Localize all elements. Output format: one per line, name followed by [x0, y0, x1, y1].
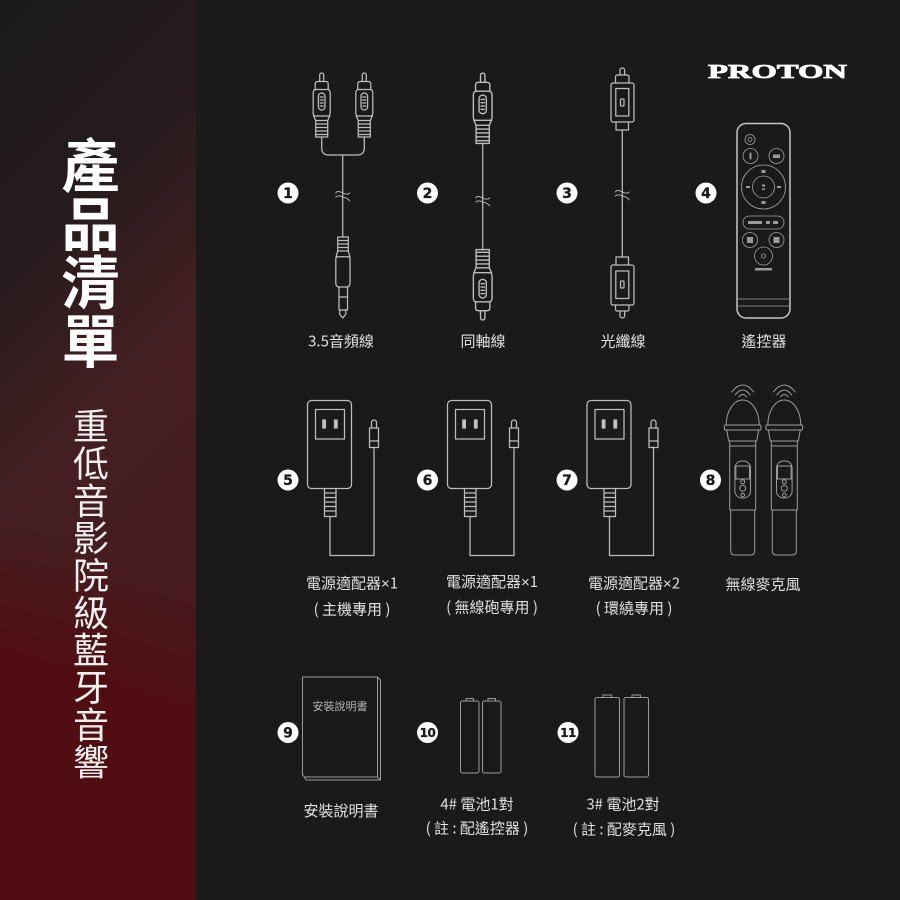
badge 4: 4: [701, 186, 711, 202]
icon: adapter: [448, 400, 518, 556]
label: 遙控器: [741, 330, 787, 352]
item 9: manual: [278, 677, 380, 821]
label: [573, 794, 675, 840]
heading: 產品清單: 品: [61, 178, 120, 262]
badge 3: [556, 182, 578, 204]
icon: two microphones: [724, 385, 803, 555]
subtitle: 重低音影院級藍牙音響: 低: [73, 436, 109, 488]
label: 3.5音頻線: [308, 330, 374, 352]
subtitle: 重低音影院級藍牙音響: 牙: [73, 660, 109, 712]
icon: adapter: [587, 400, 658, 556]
subtitle: 重低音影院級藍牙音響: 音: [73, 697, 109, 749]
subtitle: 重低音影院級藍牙音響: 影: [73, 510, 109, 562]
label: 電源適配器×1: [446, 571, 538, 592]
label: ( 主機專用 ): [314, 598, 390, 620]
badge 2: 2: [423, 186, 432, 202]
item 10: 4# batteries: [417, 698, 528, 838]
icon: 3.5mm to RCA cable: [313, 73, 373, 318]
item 8: wireless microphones: [700, 385, 803, 594]
label: [426, 794, 528, 838]
heading: 產品清單: 單: [61, 296, 120, 380]
subtitle: 重低音影院級藍牙音響: [73, 398, 109, 786]
panel: left title band: [0, 0, 196, 900]
label: 安裝說明書: [303, 800, 379, 821]
heading: 產品清單: [61, 120, 120, 380]
label: 無線麥克風: [725, 574, 801, 594]
logo: PROTON: PROTON: [708, 61, 847, 83]
label: ( 環繞專用 ): [596, 598, 672, 618]
badge 5: 5: [283, 473, 293, 489]
badge 6: [417, 470, 438, 490]
badge 1: 1: [283, 186, 293, 202]
label: [306, 572, 398, 620]
subtitle: 重低音影院級藍牙音響: 響: [73, 734, 109, 786]
label: 4# 電池1對: [440, 794, 514, 814]
icon: optical cable: [611, 68, 634, 318]
badge 7: 7: [562, 473, 572, 489]
badge 9: [278, 722, 298, 743]
item 5: power adapter for main unit: [278, 400, 398, 620]
label: [446, 571, 538, 618]
icon: two AA batteries: [595, 695, 648, 777]
item 7: power adapter for surround: [556, 400, 680, 618]
item 6: power adapter for wireless subwoofer: [417, 400, 538, 618]
icon: coaxial cable: [473, 73, 492, 320]
label: ( 註 : 配麥克風 ): [573, 818, 675, 840]
label: 電源適配器×2: [588, 572, 680, 594]
label: [588, 572, 680, 618]
badge 7: [556, 470, 578, 490]
label: 3# 電池2對: [586, 794, 660, 814]
label: 電源適配器×1: [306, 572, 398, 594]
subtitle: 重低音影院級藍牙音響: 院: [73, 548, 109, 600]
badge 5: [278, 470, 298, 490]
badge 2: [417, 182, 438, 204]
badge 6: 6: [423, 473, 432, 489]
label: ( 無線砲專用 ): [446, 596, 538, 618]
item 1: 3.5 audio cable: [278, 73, 374, 352]
item 11: 3# batteries: [558, 695, 675, 840]
subtitle: 重低音影院級藍牙音響: 級: [73, 585, 109, 637]
badge 8: 8: [706, 473, 715, 489]
icon: adapter: [308, 400, 378, 556]
badge 4: [696, 182, 716, 204]
subtitle: 重低音影院級藍牙音響: 音: [73, 473, 109, 525]
badge 8: [700, 470, 721, 490]
item 2: coaxial cable: [417, 73, 506, 352]
label: ( 註 : 配遙控器 ): [426, 818, 528, 838]
badge 11: 11: [560, 726, 576, 740]
label: 同軸線: [460, 330, 506, 352]
label: 光纖線: [600, 330, 646, 352]
icon: remote: [737, 124, 790, 318]
item 3: optical fibre cable: [556, 68, 646, 352]
subtitle: 重低音影院級藍牙音響: 藍: [73, 622, 109, 674]
icon: manual book: [302, 677, 380, 780]
badge 3: 3: [562, 186, 572, 202]
badge 11: [558, 722, 578, 743]
icon: manual book: 安裝說明書: [312, 698, 368, 714]
icon: two AAA batteries: [460, 698, 501, 773]
badge 9: 9: [283, 726, 293, 742]
badge 1: [278, 182, 298, 204]
heading: 產品清單: 清: [61, 237, 120, 321]
item 4: remote control: [696, 124, 790, 352]
subtitle: 重低音影院級藍牙音響: 重: [73, 398, 109, 450]
badge 10: 10: [420, 726, 435, 740]
heading: 產品清單: 產: [61, 120, 120, 204]
